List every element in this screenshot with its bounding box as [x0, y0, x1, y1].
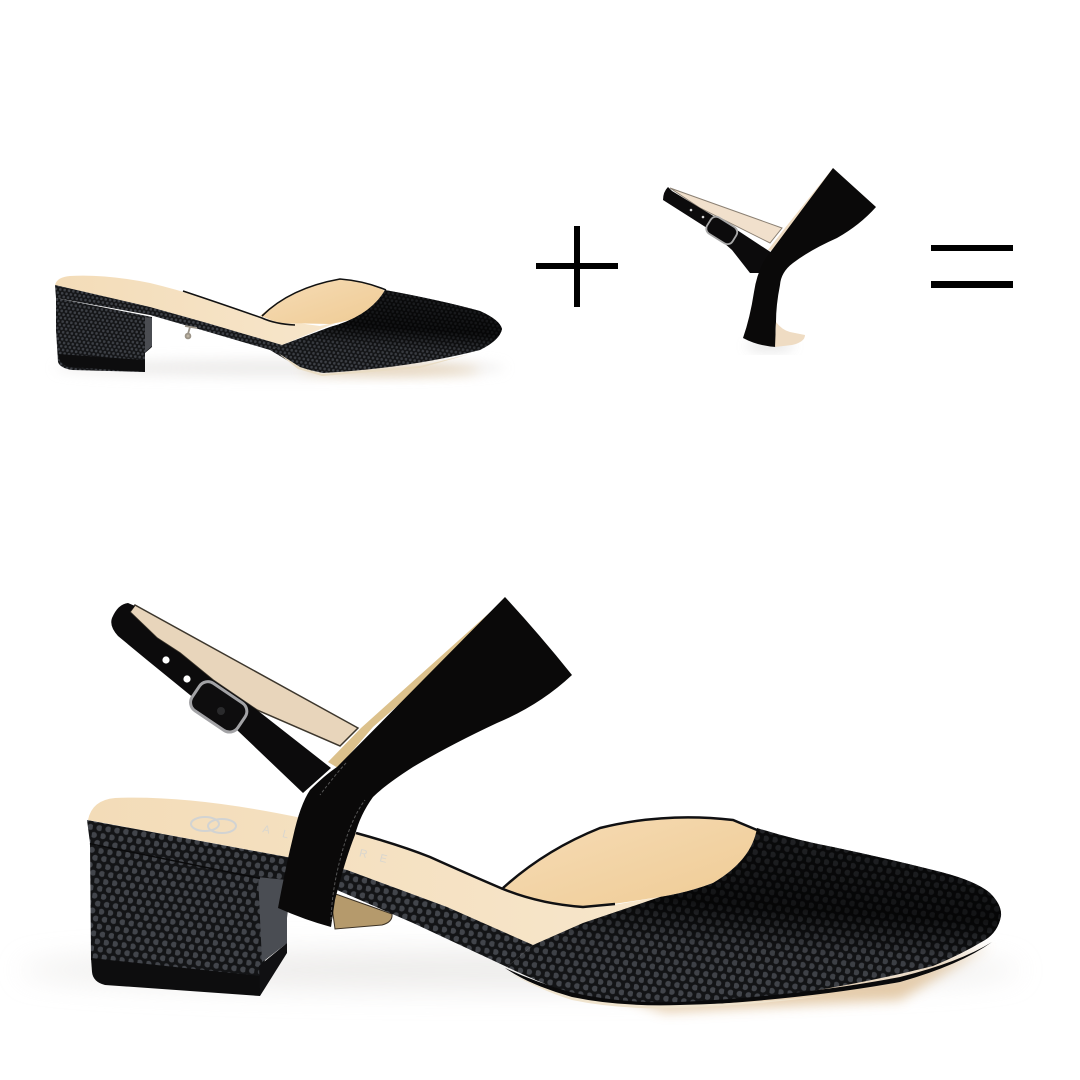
mule shadow: [55, 359, 505, 377]
mule vamp: [270, 290, 502, 373]
sandal vamp gloss: [507, 828, 1001, 1003]
combined sandal: [20, 597, 1020, 1012]
suede lining edge: [328, 597, 505, 768]
equals sign: [931, 245, 1013, 288]
mule sole: [278, 353, 470, 376]
plus sign: [536, 226, 618, 307]
sandal interior lining: [503, 818, 757, 907]
strap back lining: [670, 188, 782, 243]
mule side strip: [55, 285, 282, 350]
sandal side strip: [87, 820, 533, 967]
mule interior: [260, 279, 385, 324]
sandal vamp: [507, 828, 1001, 1003]
mule footbed: [55, 276, 338, 345]
sandal floor shadow: [20, 945, 1020, 1012]
footbed logo: [191, 817, 236, 833]
strap suede band: [743, 168, 876, 347]
suede stitching: [320, 763, 365, 920]
suede strap piece: [663, 168, 876, 349]
strap insole tab: [775, 322, 805, 347]
strap holes: [690, 209, 704, 218]
mule heel: [56, 298, 152, 372]
sandal hardware behind strap: [330, 892, 392, 929]
strap shadow: [746, 343, 794, 349]
strap buckle: [187, 678, 251, 736]
strap holes: [162, 656, 191, 683]
strap buckle: [704, 214, 739, 246]
strap lining edge: [768, 168, 833, 252]
strap back band: [663, 187, 772, 273]
sandal sole: [505, 942, 992, 1006]
sandal topline piping: [356, 817, 757, 907]
suede wide strap: [278, 597, 572, 927]
sandal footbed: [88, 798, 665, 946]
sandal heel block: [90, 843, 292, 996]
mule strap pin: [185, 326, 197, 338]
ankle strap band: [111, 603, 331, 793]
small mule shoe: [55, 276, 505, 377]
mule topline: [183, 279, 386, 325]
ankle strap lining: [130, 605, 358, 746]
footbed brand text: ALTERRE: [261, 823, 401, 869]
